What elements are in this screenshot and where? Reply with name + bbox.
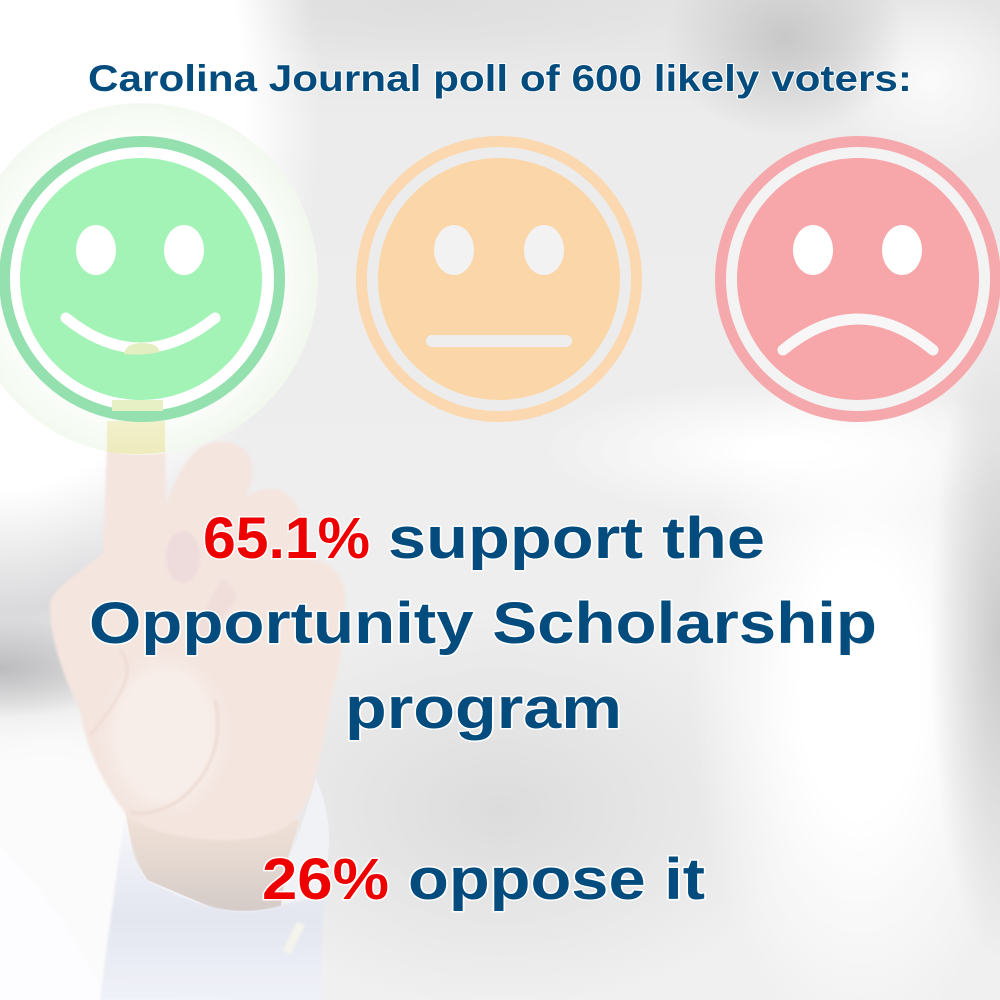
cuff back <box>270 778 329 905</box>
cuff button <box>283 922 305 955</box>
finger nails <box>166 531 200 583</box>
palm shading <box>110 663 220 807</box>
title: Carolina Journal poll of 600 likely voters: <box>88 58 912 99</box>
statistic: oppose: 26% <box>262 847 389 912</box>
palm creases <box>90 650 127 735</box>
cuff <box>100 815 324 1000</box>
statistic: oppose: oppose it <box>408 847 705 912</box>
frown <box>783 319 933 350</box>
shirt sleeve <box>0 845 100 1000</box>
statistic: oppose <box>262 847 705 912</box>
mouth <box>432 335 566 347</box>
fingertip showing through <box>124 343 160 355</box>
fingertip in glow <box>107 421 165 454</box>
green glow <box>0 103 318 455</box>
illustration: pointing hand <box>0 421 345 1000</box>
statistic: support: Opportunity Scholarship <box>89 591 877 656</box>
icon: happy face <box>4 142 280 416</box>
statistic: support: support the <box>388 506 765 571</box>
eyes <box>434 225 564 275</box>
statistic: support: 65.1% <box>203 506 370 571</box>
cuff inner <box>125 810 300 911</box>
smile <box>66 318 215 348</box>
hand <box>50 421 345 840</box>
statistic: support: program <box>345 676 622 741</box>
icon: sad face <box>720 142 996 416</box>
statistic: support <box>89 506 877 741</box>
eyes <box>793 225 922 275</box>
icon: neutral face <box>362 142 636 416</box>
eyes <box>76 225 204 275</box>
